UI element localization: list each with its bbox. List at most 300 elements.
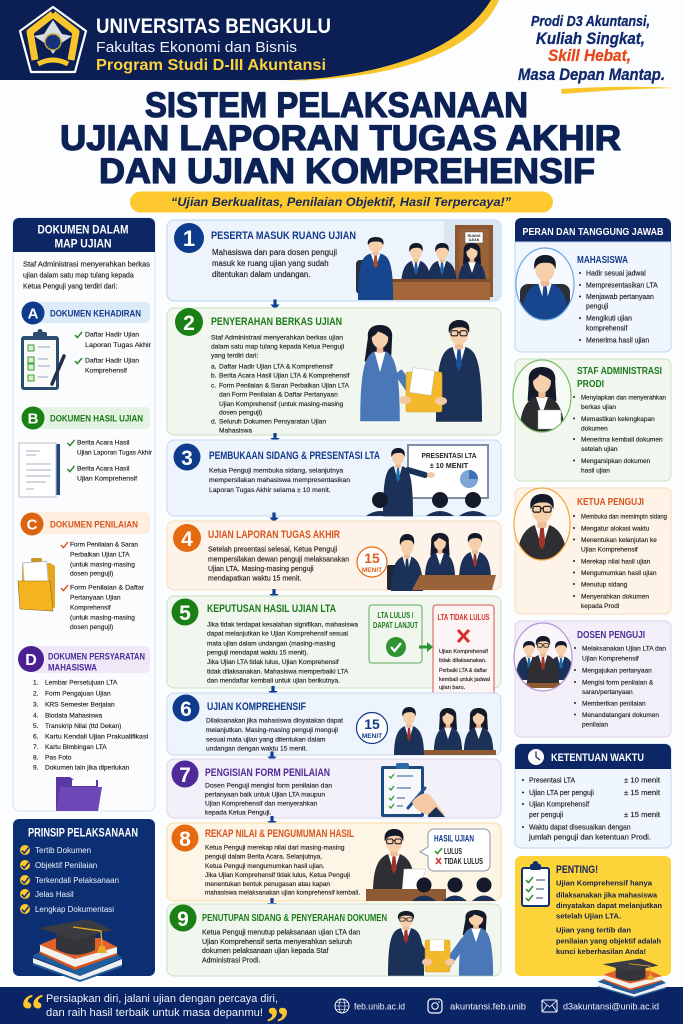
step text: kepada Ketua Penguji. [205,810,272,816]
numbered list: Kartu Bimbingan LTA [45,744,107,751]
checklist: Daftar Hadir Ujian [85,332,139,338]
step number 4: 4 [181,528,193,551]
checklist: Laporan Tugas Akhir [85,342,152,349]
numbered list: Biodata Mahasiswa [45,712,103,720]
role duties: Mempresentasikan LTA [586,282,658,290]
step text: Seluruh Dokumen Persyaratan Ujian [219,418,326,426]
quote: Persiapkan diri, jalani ujian dengan percaya diri, [46,993,278,1005]
principle checklist: Jelas Hasil [35,890,74,899]
step text: pertanyaan baik untuk Ujian LTA maupun [205,792,325,798]
step title: PENUTUPAN SIDANG & PENYERAHAN DOKUMEN [202,912,387,924]
checklist: Komprehensif [70,604,111,612]
illustration: graduation cap on books [32,919,122,982]
time rules: jumlah penguji dan ketentuan Prodi. [528,834,651,842]
time rules: ± 10 menit [624,778,660,784]
role duties: penguji [586,304,609,310]
slogan: Kuliah Singkat, [536,29,645,48]
time rules: Ujian Komprehensif [529,802,589,808]
step number 8 [172,824,198,852]
timer: 15 menit: MENIT [362,733,382,740]
footer bar [0,984,683,1024]
speech bubble: hasil ujian: HASIL UJIAN [434,834,474,844]
step text [211,334,350,434]
checklist: (untuk masing-masing [70,562,135,568]
step text: Ketua Penguji merekap nilai dari masing-masing [205,844,345,852]
step number 3: 3 [181,447,193,470]
illustration: comprehensive exam [394,707,496,755]
section D: dokumen persyaratan mahasiswa: MAHASISWA [48,662,97,674]
arrow [268,686,278,696]
role card: ketua penguji [514,488,671,614]
quote [21,984,289,1024]
principle checklist: Tertib Dokumen [35,846,91,855]
arrow [267,898,277,908]
icon: yellow folder [18,558,55,611]
section A: dokumen kehadiran [21,302,152,390]
panel: step 2 [167,308,501,435]
step text: yang terdiri dari: [211,352,258,360]
time rules: ± 15 menit [624,790,660,797]
step text: mahasiswa melaksanakan ujian komprehensif kembali. [205,890,360,896]
step text: Ujian Komprehensif serta menyerahkan seluruh [202,939,352,946]
numbered list: 4. [33,712,39,720]
portrait: examiners [514,623,574,691]
arrow [269,512,279,522]
slogan: Skill Hebat, [548,46,631,65]
step text: a. [211,364,217,370]
step text: melanjutkan. Masing-masing penguji menguji [206,727,338,734]
header banner [0,0,499,81]
step number 6: 6 [180,698,192,721]
role card: staf administrasi prodi [513,359,671,481]
role card: mahasiswa [515,242,671,352]
decision box: LTA tidak lulus: kembali untuk jadwal [439,677,490,683]
speech bubble: hasil ujian: LULUS [444,847,462,856]
title [60,86,621,191]
university name: UNIVERSITAS BENGKULU [96,15,331,38]
checklist: dosen penguji) [70,570,113,578]
principle checklist [20,845,119,914]
callout text: dilaksanakan jika mahasiswa [556,890,658,900]
numbered list: Dokumen lain jika diperlukan [45,764,130,772]
timer: 15 menit: 15 [364,716,380,732]
step number 1: 1 [183,226,195,251]
illustration: announcing results [366,829,496,901]
section A: dokumen kehadiran: A [28,306,39,322]
step text [209,468,350,494]
time rules: Presentasi LTA [529,778,575,784]
numbered list: 8. [33,754,39,762]
step text: Ujian Komprehensif dan menyerahkan [205,800,317,808]
step text: Daftar Hadir Ujian LTA & Komprehensif [219,364,333,370]
section B: dokumen hasil ujian: DOKUMEN HASIL UJIAN [50,414,143,424]
numbered list: 2. [33,690,39,698]
numbered list: 9. [33,764,39,772]
panel: step 9 [167,904,501,976]
step text: b. [211,372,217,380]
checklist: Berita Acara Hasil [77,440,130,446]
step text: dokumen pelaksanaan ujian kepada Staf [202,948,329,955]
decision box: LTA tidak lulus: Perbaiki LTA & daftar [439,668,487,674]
role duties: Merekap nilai hasil ujian [581,558,651,566]
step text [207,622,358,684]
panel: step 8 [167,823,501,901]
step number 5: 5 [179,602,191,625]
role duties: Mengumumkan hasil ujian [581,570,657,577]
portrait: admin staff [513,360,571,439]
checklist [75,332,152,374]
role duties: saran/pertanyaan [582,689,633,696]
logo: Universitas Bengkulu crest [20,7,86,72]
role title: PRODI [577,379,604,390]
step title: REKAP NILAI & PENGUMUMAN HASIL [205,828,354,840]
panel: prinsip pelaksanaan: PRINSIP PELAKSANAAN [28,828,138,840]
role duties: Mengatur alokasi waktu [581,526,650,532]
role duties: Menyiapkan dan menyerahkan [581,394,666,402]
section C: dokumen penilaian: C [27,516,38,534]
step number 9 [170,904,196,932]
panel: step 3 [167,440,501,516]
step text [205,844,360,896]
step title: UJIAN KOMPREHENSIF [207,701,306,713]
time rules: Waktu dapat disesuaikan dengan [529,824,631,832]
tagline pill [130,192,553,212]
numbered list: 6. [33,734,39,740]
panel heading: DOKUMEN DALAM [38,222,129,236]
timer: 15 menit: MENIT [362,567,382,574]
panel: step 1 [167,220,501,301]
checklist: Komprehensif [85,368,127,374]
step text: dapat melanjutkan ke Ujian Komprehensif sesuai [207,630,348,638]
icon: checklist clipboard [522,861,549,906]
section B: dokumen hasil ujian: B [28,410,39,428]
panel: dokumen dalam map ujian [13,218,155,811]
step text: mendapatkan waktu 15 menit. [208,576,301,582]
step text [202,930,360,964]
role duties: Mengisi form penilaian & [582,680,654,686]
step text: undangan dengan waktu 15 menit. [206,746,307,752]
step title: UJIAN LAPORAN TUGAS AKHIR [208,529,340,541]
step text: mata ujian dalam undangan (masing-masing [207,640,336,648]
role title: KETUA PENGUJI [577,497,644,508]
checklist: Form Penilaian & Saran [70,542,138,548]
step text: Jika Ujian LTA tidak lulus, Ujian Komprehensif [207,659,339,666]
arrow: green to fail box [419,642,433,652]
principle checklist: Objektif Penilaian [35,861,97,870]
role title: STAF ADMINISTRASI [577,366,662,377]
illustration: student entering exam room: RUANG [468,234,481,238]
callout text: setelah Ujian LTA. [556,912,621,920]
role duties: Menentukan kelanjutan ke [581,537,657,544]
step text: menentukan bentuk penugasan atau kapan [205,881,330,888]
checklist: dosen penguji) [70,624,113,631]
step title: KEPUTUSAN HASIL UJIAN LTA [207,603,336,615]
numbered list: 1. [33,680,39,686]
step title: PENGISIAN FORM PENILAIAN [205,767,330,779]
section D: dokumen persyaratan mahasiswa: DOKUMEN PERSYARATAN [48,652,145,662]
callout: penting [515,856,671,976]
decision box: LTA tidak lulus [433,605,494,695]
step text: c. [211,382,216,390]
time rules [522,778,660,842]
step text: Form Penilaian & Saran Perbaikan Ujian LTA [219,382,350,390]
callout text: kunci keberhasilan Anda! [556,947,646,956]
checklist: Ujian Laporan Tugas Akhir [77,450,153,456]
university name: Fakultas Ekonomi dan Bisnis [96,39,297,56]
step text: Ujian LTA. Masing-masing penguji [208,566,314,573]
role duties: Memberikan penilaian [582,700,646,708]
intro text [23,262,151,290]
panel: ketentuan waktu [515,744,671,848]
principle checklist: Lengkap Dokumentasi [35,905,114,914]
step number 7: 7 [179,764,191,787]
step text [208,546,349,582]
time rules: Ujian LTA per penguji [529,790,594,797]
decision box: LTA tidak lulus: Ujian Komprehensif [439,649,488,655]
role duties: Memastikan kelengkapan [581,416,655,423]
role duties: dokumen [581,426,608,432]
role title: DOSEN PENGUJI [577,630,645,641]
intro text: ujian dalam satu map tulang kepada [23,272,134,280]
illustration: examiners panel [387,533,496,591]
role duties [573,514,667,610]
checklist: Berita Acara Hasil [77,466,130,472]
decision box: LTA lulus: DAPAT LANJUT [373,621,418,630]
numbered list: 5. [33,723,39,730]
step text: penguji mendapat waktu 15 menit). [207,650,308,656]
step text: dalam satu map tulang kepada Ketua Penguji [211,344,345,350]
step text: Ketua Penguji menutup pelaksanaan ujian LTA dan [202,930,360,936]
checklist: Daftar Hadir Ujian [85,358,139,364]
panel: step 5 [167,596,501,695]
step number 4 [173,524,201,552]
contact: instagram: akuntansi.feb.unib [450,1002,526,1012]
role duties: Mengikuti ujian [586,316,632,322]
step number 2: 2 [183,312,195,335]
portrait: head examiner [514,488,570,572]
step text: Ketua Penguji membuka sidang, selanjutnya [209,468,343,474]
portrait: student [516,248,574,327]
step text: mempersilakan mahasiswa mempresentasikan [209,477,350,484]
university name: Program Studi D-III Akuntansi [96,57,326,74]
university name [96,15,331,74]
step number 7 [172,760,198,788]
role duties: Menutup sidang [581,582,628,588]
step text: Berita Acara Hasil Ujian LTA & Komprehensif [219,372,350,380]
title: DAN UJIAN KOMPREHENSIF [99,152,595,191]
numbered list: 7. [33,744,39,751]
step text: Ketua Penguji mengumumkan hasil ujian. [205,863,325,870]
panel: step 6 [167,693,501,755]
panel heading: KETENTUAN WAKTU [551,752,644,764]
icon: purple folder [56,777,102,811]
icon: clipboard checklist [21,329,64,390]
numbered list [33,680,149,772]
role duties: Ujian Komprehensif [582,656,639,662]
speech bubble: hasil ujian: TIDAK LULUS [444,857,483,866]
role duties: Menyerahkan dokumen [581,594,649,600]
role duties: penilaian [582,722,608,728]
icon: clock [528,749,544,765]
numbered list: Transkrip Nilai (ttd Dekan) [45,723,121,730]
step text: Setelah presentasi selesai, Ketua Penguji [208,546,338,554]
step text: dan mendaftar kembali untuk ujian berikutnya. [207,678,340,684]
panel: step 4 [167,521,501,591]
section D: dokumen persyaratan mahasiswa [18,646,150,811]
checklist [61,542,145,631]
step text: Mahasiswa [219,428,252,434]
panel: step 7 [167,759,501,818]
step title: PEMBUKAAN SIDANG & PRESENTASI LTA [209,450,380,462]
decision box: LTA tidak lulus: ujian baru. [439,685,466,691]
numbered list: Form Pengajuan Ujian [45,690,111,698]
role duties: berkas ujian [581,404,616,411]
step text: Ujian Komprehensif (untuk masing-masing [219,401,344,408]
arrow [267,816,277,826]
illustration: filling the form [381,763,445,817]
step text: masuk ke ruang ujian yang sudah [212,259,329,268]
role duties: kepada Prodi [581,603,619,610]
role duties: Menandatangani dokumen [582,712,659,719]
step text: tidak dilaksanakan. Mahasiswa memperbaiki LTA [207,668,349,676]
slogan: Masa Depan Mantap. [518,65,665,84]
step text: sesuai mata ujian yang ditentukan dalam [206,736,326,744]
step text: Jika Ujian Komprehensif tidak lulus, Ketua Penguji [205,872,350,879]
illustration: presentation board: ± 10 MENIT [430,461,469,470]
checklist: Form Penilaian & Daftar [70,584,145,592]
intro text: Staf Administrasi menyerahkan berkas [23,262,151,268]
step text: Dilaksanakan jika mahasiswa dinyatakan dapat [206,718,343,724]
section C: dokumen penilaian [18,512,150,631]
role duties: Mengarsipkan dokumen [581,458,651,465]
role duties: Menjawab pertanyaan [586,294,654,301]
step text [206,718,343,752]
decision box: LTA lulus: LTA LULUS / [378,611,414,620]
role title [577,366,662,390]
contact: website: feb.unib.ac.id [354,1002,405,1012]
role card: dosen penguji [514,621,671,737]
role duties: Menerima hasil ujian [586,338,649,344]
role duties: Melaksanakan Ujian LTA dan [582,646,666,652]
arrow [269,589,279,599]
timer: 15 menit: 15 [364,550,380,566]
role duties: Mengajukan pertanyaan [582,668,652,674]
step text: dan Form Penilaian & Daftar Pertanyaan [219,392,338,398]
icon: paper document stack [19,443,60,497]
step text: Mahasiswa dan para dosen penguji [212,248,337,257]
section B: dokumen hasil ujian [19,406,153,497]
role duties [574,646,666,728]
checklist [68,440,153,482]
checklist: Perbaikan Ujian LTA [70,552,130,558]
step title: PENYERAHAN BERKAS UJIAN [211,316,342,328]
role duties: Hadir sesuai jadwal [586,270,646,278]
callout heading: PENTING! [556,864,598,876]
speech bubble: hasil ujian [420,829,490,871]
illustration: handing over documents [360,320,482,422]
role duties: komprehensif [586,326,627,332]
slogan [518,13,675,94]
callout text [556,878,662,956]
role duties: Membuka dan memimpin sidang [581,514,667,520]
arrow [270,300,280,310]
step text: Administrasi Prodi. [202,958,260,964]
illustration: closing hand-over [388,910,493,976]
illustration: student entering exam room: UJIAN [469,238,480,242]
principle checklist: Terkendali Pelaksanaan [35,876,119,885]
panel: prinsip pelaksanaan [13,819,155,982]
step number 9: 9 [177,908,189,931]
section D: dokumen persyaratan mahasiswa: D [25,652,37,669]
step text: d. [211,418,217,426]
role duties [579,270,658,344]
illustration: presentation board: PRESENTASI LTA [422,451,476,460]
numbered list: KRS Semester Berjalan [45,702,115,708]
step text: Laporan Tugas Akhir selama ± 10 menit. [209,487,331,494]
numbered list: Lembar Persetujuan LTA [45,680,118,686]
numbered list: 3. [33,702,39,708]
callout text: Ujian yang tertib dan [556,926,631,934]
step text: penguji dalam Berita Acara. Selanjutnya, [205,854,322,860]
step text [212,248,337,279]
role title: MAHASISWA [577,255,628,266]
contact: email [542,1000,659,1012]
quote: dan raih hasil terbaik untuk masa depanmu! [46,1007,263,1019]
role duties: Menerima kembali dokumen [581,436,663,444]
step number 5 [172,598,198,626]
step number 3 [174,444,200,470]
step text: dosen penguji) [219,410,262,416]
contact: email: d3akuntansi@unib.ac.id [563,1002,659,1012]
checklist: Pertanyaan Ujian [70,594,121,602]
step title: PESERTA MASUK RUANG UJIAN [211,230,356,242]
role duties: Ujian Komprehensif [581,546,638,554]
tagline pill: “Ujian Berkualitas, Penilaian Objektif, Hasil Terpercaya!” [171,197,511,209]
step text: Jika tidak terdapat kesalahan signifikan, mahasiswa [207,622,358,628]
illustration: student entering exam room [356,221,500,300]
section C: dokumen penilaian: DOKUMEN PENILAIAN [50,520,138,530]
step text: ditentukan dalam undangan. [212,270,310,279]
numbered list: Pas Foto [45,754,72,762]
timer: 15 menit [356,712,388,744]
intro text: Ketua Penguji yang terdiri dari: [23,284,117,290]
section A: dokumen kehadiran: DOKUMEN KEHADIRAN [50,308,141,320]
time rules: per penguji [529,812,564,819]
step number 2 [175,308,203,336]
timer: 15 menit [357,547,387,577]
callout text: dinyatakan dapat melanjutkan [556,901,662,910]
time rules: ± 15 menit [624,812,660,819]
title: SISTEM PELAKSANAAN [145,86,528,125]
step text [205,782,332,816]
step text: mempersilakan dewan penguji melaksanakan [208,556,349,564]
role duties [573,394,666,474]
contact: website [335,999,405,1013]
panel heading [38,222,129,250]
illustration: presentation board [366,445,488,516]
checklist: (untuk masing-masing [70,614,135,622]
step text: Staf Administrasi menyerahkan berkas ujian [211,334,343,342]
role duties: setelah ujian [581,446,618,453]
callout text: penilaian yang objektif adalah [556,936,661,946]
step number 8: 8 [179,828,191,851]
decision box: LTA tidak lulus: tidak dilaksanakan. [439,658,487,664]
contact: instagram [428,999,526,1013]
slogan: Prodi D3 Akuntansi, [531,13,650,30]
checklist: Ujian Komprehensif [77,476,137,482]
arrow [267,752,277,762]
step text: Dosen Penguji mengisi form penilaian dan [205,782,332,790]
